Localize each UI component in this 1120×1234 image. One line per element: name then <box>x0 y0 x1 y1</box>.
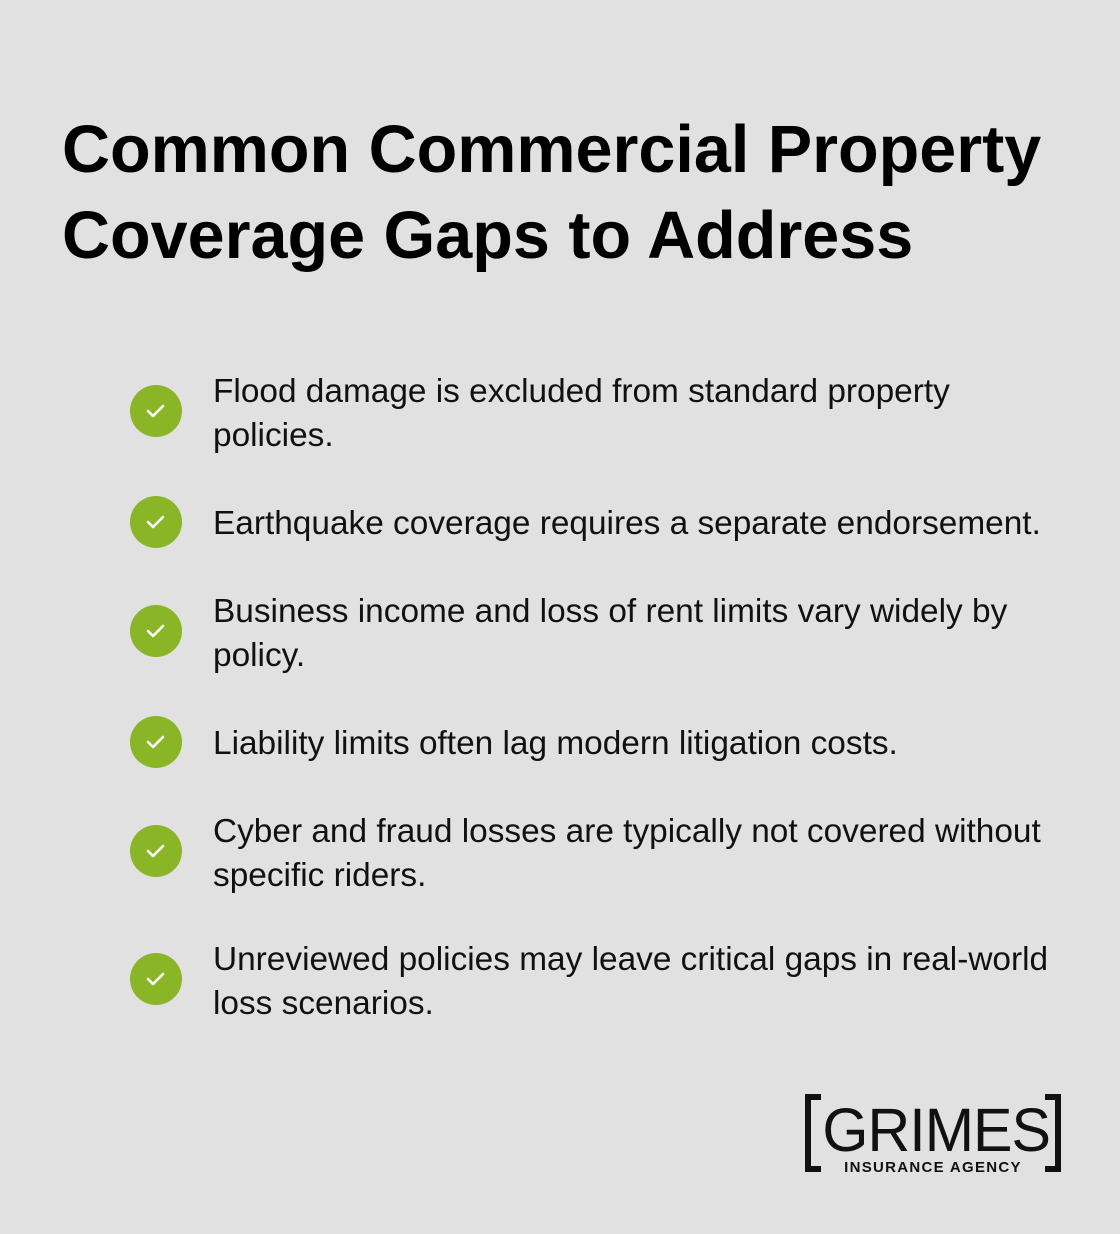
text <box>213 373 950 454</box>
text: Liability limits often lag modern litigation costs. <box>213 725 898 762</box>
text: loss scenarios. <box>213 985 434 1022</box>
text: policies. <box>213 417 334 454</box>
icon: check <box>130 825 182 877</box>
icon: check <box>130 716 182 768</box>
icon: check <box>130 496 182 548</box>
text: Flood damage is excluded from standard property <box>213 373 950 410</box>
item 5 <box>130 813 1041 894</box>
text <box>213 941 1048 1022</box>
icon: check <box>130 953 182 1005</box>
item 4 <box>130 716 898 768</box>
item 3 <box>130 593 1008 674</box>
text: Cyber and fraud losses are typically not covered without <box>213 813 1041 850</box>
text <box>213 593 1008 674</box>
logo: GRIMES: GRIMES <box>822 1096 1050 1164</box>
text: Unreviewed policies may leave critical gaps in real-world <box>213 941 1048 978</box>
item 1 <box>130 373 950 454</box>
logo: left bracket <box>805 1094 821 1172</box>
text: Business income and loss of rent limits vary widely by <box>213 593 1007 630</box>
logo: right bracket <box>1045 1094 1061 1172</box>
text: Earthquake coverage requires a separate endorsement. <box>213 505 1041 542</box>
item 6 <box>130 941 1048 1022</box>
title: Coverage Gaps to Address <box>62 199 913 273</box>
title <box>62 113 1041 273</box>
title: Common Commercial Property <box>62 113 1041 187</box>
icon: check <box>130 605 182 657</box>
logo <box>805 1094 1061 1176</box>
text <box>213 813 1041 894</box>
text: specific riders. <box>213 857 426 894</box>
item 2 <box>130 496 1041 548</box>
text: policy. <box>213 637 305 674</box>
icon: check <box>130 385 182 437</box>
logo: subtitle: INSURANCE AGENCY <box>844 1159 1022 1176</box>
